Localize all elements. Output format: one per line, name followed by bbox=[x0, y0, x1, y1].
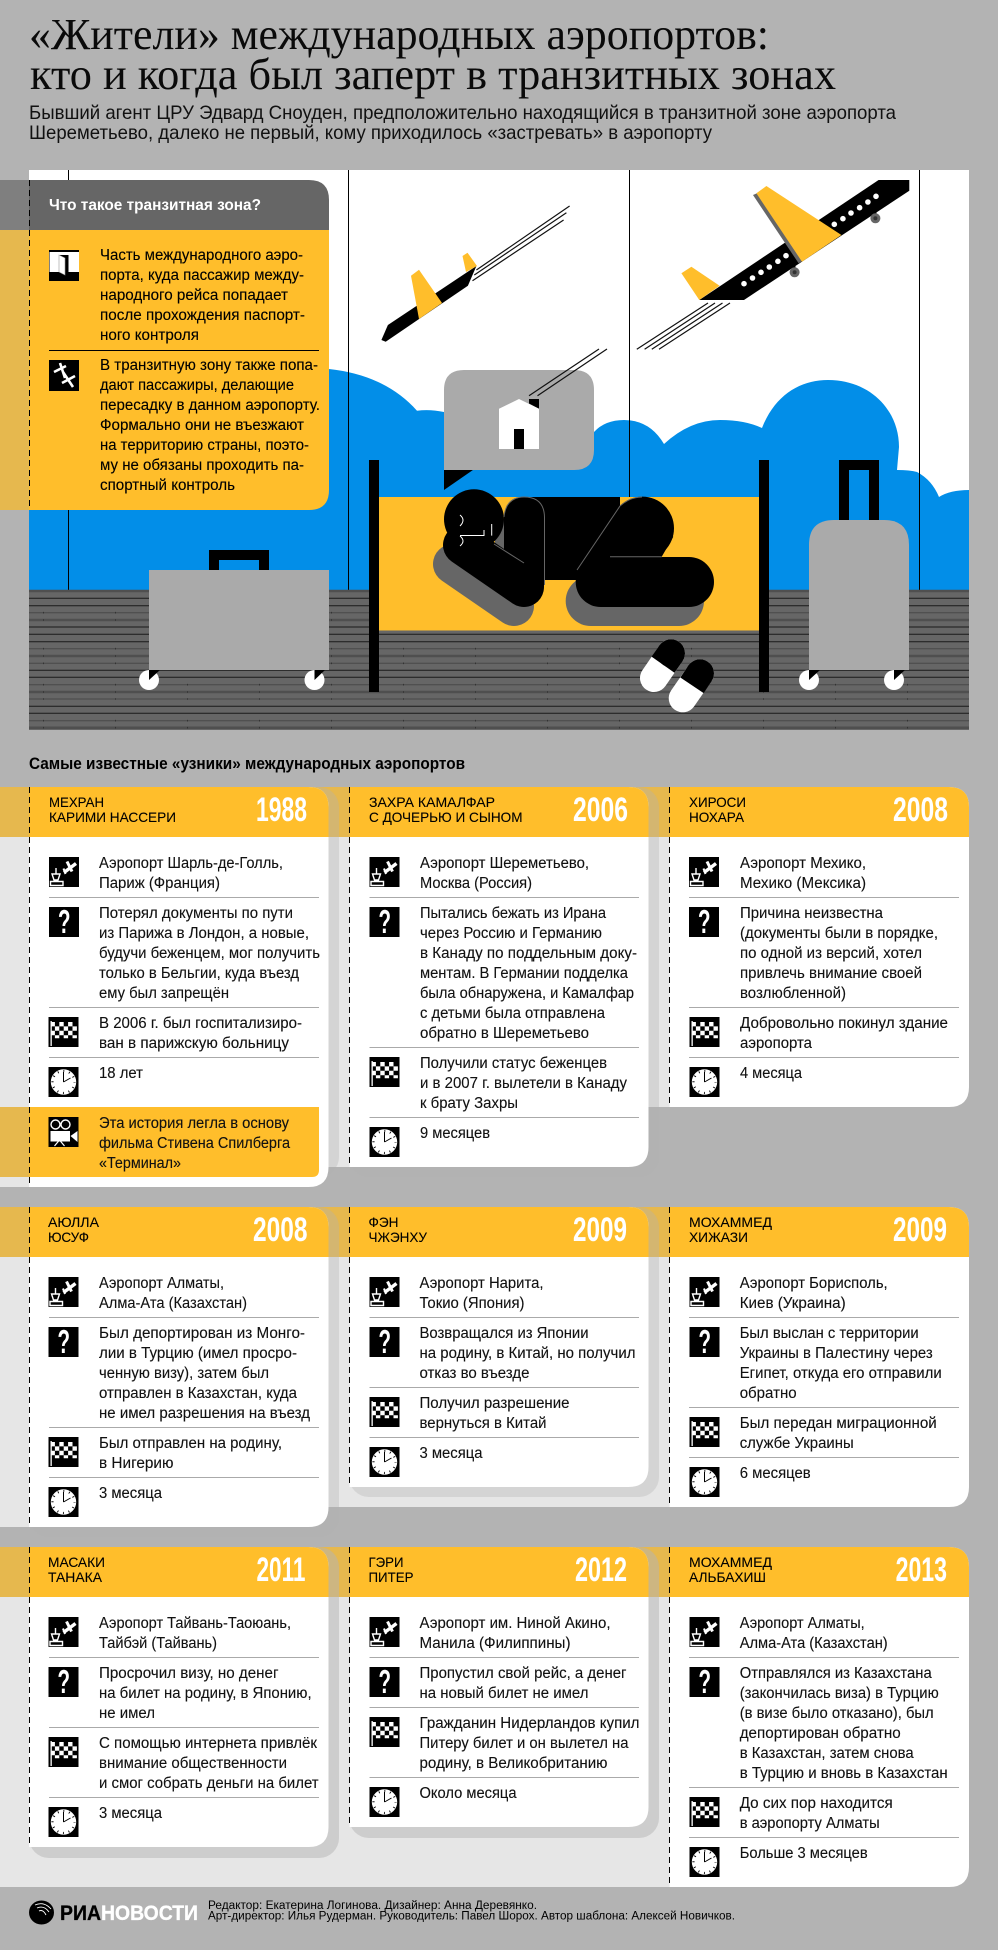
icon: door bbox=[49, 250, 79, 281]
icon: finish flag bbox=[370, 1397, 400, 1427]
card header: ХИРОСИ bbox=[689, 794, 746, 810]
text: definition: Часть международного аэро- bbox=[100, 247, 303, 264]
card header: АЛЬБАХИШ bbox=[689, 1569, 766, 1585]
subtitle: Шереметьево, далеко не первый, кому приходилось «застревать» в аэропорту bbox=[29, 122, 712, 144]
panel heading: Что такое транзитная зона? bbox=[49, 197, 261, 214]
text: outcome bbox=[420, 1715, 640, 1772]
card header: 2008 bbox=[253, 1211, 308, 1249]
row 1 strips and shadows bbox=[0, 787, 670, 1187]
icon: question bbox=[48, 1663, 78, 1700]
text: reason: не имел разрешения на въезд bbox=[99, 1405, 310, 1422]
icon: crossed planes bbox=[49, 360, 79, 391]
text: reason: лии в Турцию (имел просро- bbox=[99, 1345, 297, 1362]
text: outcome: вернуться в Китай bbox=[420, 1415, 546, 1432]
card header bbox=[350, 787, 648, 837]
text: airport: Алма-Ата (Казахстан) bbox=[99, 1295, 247, 1312]
text: reason: возлюбленной) bbox=[740, 985, 846, 1002]
text: reason: Просрочил визу, но денег bbox=[99, 1665, 279, 1682]
icon: clock bbox=[370, 1787, 400, 1817]
card header bbox=[29, 787, 328, 837]
icon: finish flag bbox=[370, 1057, 400, 1087]
text: reason: через Россию и Германию bbox=[420, 925, 602, 942]
text: outcome: службе Украины bbox=[740, 1435, 854, 1452]
text: reason: в Казахстан, затем снова bbox=[740, 1745, 914, 1762]
text: reason: депортирован обратно bbox=[740, 1725, 901, 1742]
text: reason: отказ во въезде bbox=[420, 1365, 530, 1382]
text: outcome: и в 2007 г. вылетели в Канаду bbox=[420, 1075, 627, 1092]
card header: ТАНАКА bbox=[48, 1569, 103, 1585]
text: reason: на родину, в Китай, но получил bbox=[420, 1345, 636, 1362]
text: outcome bbox=[99, 1735, 319, 1792]
card: Zahra Kamalfar bbox=[350, 787, 648, 1167]
text: reason: (документы были в порядке, bbox=[740, 925, 938, 942]
text: airport: Аэропорт Алматы, bbox=[740, 1615, 865, 1632]
card header bbox=[29, 1207, 328, 1257]
text: duration: Около месяца bbox=[420, 1785, 517, 1802]
text: airport: Манила (Филиппины) bbox=[420, 1635, 570, 1652]
icon: finish flag bbox=[370, 1717, 400, 1747]
card header: 2012 bbox=[575, 1551, 627, 1589]
callout: Terminal film: фильма Стивена Спилберга bbox=[99, 1135, 290, 1152]
card header: ФЭН bbox=[368, 1214, 398, 1230]
card header: ЮСУФ bbox=[48, 1229, 89, 1245]
text: outcome: До сих пор находится bbox=[740, 1795, 893, 1812]
text: transit passengers: В транзитную зону также попа- bbox=[100, 357, 318, 374]
title: кто и когда был заперт в транзитных зонах bbox=[30, 50, 836, 99]
subtitle: Бывший агент ЦРУ Эдвард Сноуден, предположительно находящийся в транзитной зоне аэропорта bbox=[29, 102, 896, 124]
text: airport bbox=[740, 855, 866, 892]
icon: question bbox=[48, 1323, 78, 1360]
text: airport bbox=[99, 855, 283, 892]
icon: airport bbox=[49, 857, 79, 887]
icon: airport bbox=[48, 1617, 78, 1647]
text: airport bbox=[740, 1615, 888, 1652]
text: reason: из Парижа в Лондон, а новые, bbox=[99, 925, 309, 942]
text: outcome: Был отправлен на родину, bbox=[99, 1435, 282, 1452]
icon: airport bbox=[689, 857, 719, 887]
text: transit passengers: пересадку в данном аэропорту. bbox=[100, 397, 320, 414]
card header: 2011 bbox=[256, 1551, 306, 1589]
card header bbox=[670, 1207, 969, 1257]
icon: clock bbox=[48, 1067, 78, 1097]
logo: RIA Novosti: РИА bbox=[60, 1902, 101, 1925]
icon: question bbox=[49, 903, 79, 940]
text: transit passengers: Формально они не въезжают bbox=[100, 417, 304, 434]
icon: question bbox=[370, 1663, 400, 1700]
text: airport bbox=[420, 855, 589, 892]
row 3 strips and shadows bbox=[0, 1547, 670, 1887]
text: outcome: в аэропорту Алматы bbox=[740, 1815, 880, 1832]
text: airport bbox=[99, 1615, 291, 1652]
clouds and sky bbox=[29, 369, 969, 590]
text: reason: Пропустил свой рейс, а денег bbox=[420, 1665, 627, 1682]
text: reason: по одной из версий, хотел bbox=[740, 945, 922, 962]
text: reason: ему был запрещён bbox=[99, 985, 229, 1002]
card: Feng Zhenghu bbox=[350, 1207, 648, 1487]
icon: clock bbox=[690, 1467, 720, 1497]
title bbox=[29, 10, 836, 99]
text: outcome bbox=[420, 1055, 627, 1112]
text: outcome: внимание общественности bbox=[99, 1755, 287, 1772]
text: airport bbox=[99, 1275, 247, 1312]
icon: finish flag bbox=[690, 1417, 720, 1447]
text: duration: 3 месяца bbox=[420, 1445, 483, 1462]
icon: clock bbox=[690, 1067, 720, 1097]
text: airport: Токио (Япония) bbox=[420, 1295, 524, 1312]
text: airport: Тайбэй (Тайвань) bbox=[99, 1635, 217, 1652]
card header: 2009 bbox=[893, 1211, 947, 1249]
text: outcome: к брату Захры bbox=[420, 1095, 518, 1112]
text: reason bbox=[740, 1325, 942, 1402]
icon: clock bbox=[690, 1847, 720, 1877]
card: Gary Peter bbox=[350, 1547, 648, 1827]
title: «Жители» международных аэропортов: bbox=[29, 10, 769, 59]
text: outcome bbox=[740, 1415, 937, 1452]
card header: С ДОЧЕРЬЮ И СЫНОМ bbox=[369, 809, 522, 825]
text: reason: ментам. В Германии подделка bbox=[420, 965, 628, 982]
illustration: airport scene bbox=[29, 170, 969, 730]
text: definition bbox=[100, 247, 305, 344]
text: reason: привлечь внимание своей bbox=[740, 965, 922, 982]
text: outcome: С помощью интернета привлёк bbox=[99, 1735, 317, 1752]
card header bbox=[670, 787, 969, 837]
credits: Редактор: Екатерина Логинова. Дизайнер: Анна Деревянко. bbox=[208, 1900, 537, 1912]
text: reason: Отправлялся из Казахстана bbox=[740, 1665, 932, 1682]
icon: airport bbox=[690, 1617, 720, 1647]
text: reason: Причина неизвестна bbox=[740, 905, 883, 922]
icon: airport bbox=[370, 1277, 400, 1307]
bench bbox=[379, 497, 759, 632]
card: Mohammed Hijazi bbox=[670, 1207, 969, 1507]
icon: airport bbox=[690, 1277, 720, 1307]
card: Mehran Karimi Nasseri bbox=[0, 787, 328, 1187]
text: airport: Мехико (Мексика) bbox=[740, 875, 866, 892]
text: reason bbox=[99, 1325, 310, 1422]
text: airport bbox=[420, 1615, 610, 1652]
card: Ayulla Yusuf bbox=[29, 1207, 328, 1527]
text: airport: Париж (Франция) bbox=[99, 875, 220, 892]
text: definition: ного контроля bbox=[100, 327, 199, 344]
small plane bbox=[381, 206, 570, 342]
panel: what is a transit zone bbox=[0, 180, 329, 510]
text: reason: отправлен в Казахстан, куда bbox=[99, 1385, 297, 1402]
text: airport: Аэропорт им. Ниной Акино, bbox=[420, 1615, 610, 1632]
credits: Арт-директор: Илья Рудерман. Руководитель: Павел Шорох. Автор шаблона: Алексей Новичков. bbox=[208, 1910, 735, 1922]
text: reason: только в Бельгии, куда въезд bbox=[99, 965, 299, 982]
card header bbox=[670, 1547, 969, 1597]
card header: ПИТЕР bbox=[368, 1569, 414, 1585]
text: outcome: Гражданин Нидерландов купил bbox=[420, 1715, 640, 1732]
card header bbox=[350, 1547, 648, 1597]
text: reason: на билет на родину, в Японию, bbox=[99, 1685, 312, 1702]
text: airport: Аэропорт Борисполь, bbox=[740, 1275, 888, 1292]
text: reason: Пытались бежать из Ирана bbox=[420, 905, 606, 922]
text: reason bbox=[740, 905, 938, 1002]
text: outcome bbox=[740, 1795, 893, 1832]
icon: finish flag bbox=[48, 1737, 78, 1767]
text: reason: с детьми была отправлена bbox=[420, 1005, 605, 1022]
subtitle bbox=[29, 102, 896, 144]
card header: МОХАММЕД bbox=[689, 1554, 773, 1570]
text: airport: Москва (Россия) bbox=[420, 875, 532, 892]
text: transit passengers bbox=[100, 357, 320, 494]
card header: АЮЛЛА bbox=[48, 1214, 100, 1230]
card header: ЧЖЭНХУ bbox=[368, 1229, 427, 1245]
text: duration: 3 месяца bbox=[99, 1805, 162, 1822]
icon: airport bbox=[370, 857, 400, 887]
card header: 2006 bbox=[573, 791, 628, 829]
text: outcome bbox=[740, 1015, 948, 1052]
text: reason bbox=[99, 1665, 312, 1722]
card: Hiroshi Nohara bbox=[670, 787, 969, 1107]
card header: МЕХРАН bbox=[49, 794, 104, 810]
text: airport bbox=[740, 1275, 888, 1312]
icon: clock bbox=[370, 1127, 400, 1157]
card header bbox=[29, 1547, 328, 1597]
icon: clock bbox=[48, 1487, 78, 1517]
text: outcome bbox=[99, 1015, 302, 1052]
text: reason: в Канаду по поддельным доку- bbox=[420, 945, 637, 962]
text: airport: Аэропорт Алматы, bbox=[99, 1275, 224, 1292]
text: reason: Египет, откуда его отправили bbox=[740, 1365, 942, 1382]
text: reason: на новый билет не имел bbox=[420, 1685, 588, 1702]
logo: RIA Novosti bbox=[29, 1900, 198, 1925]
card header: ЗАХРА КАМАЛФАР bbox=[369, 794, 495, 810]
card header: ГЭРИ bbox=[368, 1554, 404, 1570]
text: outcome: Добровольно покинул здание bbox=[740, 1015, 948, 1032]
speech bubble with house bbox=[444, 349, 607, 490]
text: outcome bbox=[99, 1435, 282, 1472]
callout: Terminal film bbox=[0, 1107, 319, 1177]
icon: finish flag bbox=[48, 1437, 78, 1467]
text: duration: 4 месяца bbox=[740, 1065, 802, 1082]
icon: finish flag bbox=[690, 1797, 720, 1827]
sleeping person bbox=[444, 489, 714, 626]
text: reason: Возвращался из Японии bbox=[420, 1325, 588, 1342]
callout: Terminal film: Эта история легла в основу bbox=[99, 1115, 289, 1132]
bench poles bbox=[369, 460, 769, 692]
icon: airport bbox=[48, 1277, 78, 1307]
icon: question bbox=[690, 1663, 720, 1700]
icon: finish flag bbox=[48, 1017, 78, 1047]
text: outcome: родину, в Великобританию bbox=[420, 1755, 608, 1772]
text: transit passengers: дают пассажиры, делающие bbox=[100, 377, 294, 394]
card header: 2008 bbox=[893, 791, 948, 829]
icon: finish flag bbox=[690, 1017, 720, 1047]
text: airport: Аэропорт Шарль-де-Голль, bbox=[99, 855, 283, 872]
large plane bbox=[637, 180, 909, 349]
text: airport: Алма-Ата (Казахстан) bbox=[740, 1635, 888, 1652]
text: reason: Был депортирован из Монго- bbox=[99, 1325, 305, 1342]
card: Mohammed Albahish bbox=[670, 1547, 969, 1887]
text: reason: Был выслан с территории bbox=[740, 1325, 919, 1342]
card: Masaki Tanaka bbox=[29, 1547, 328, 1847]
text: airport bbox=[420, 1275, 544, 1312]
text: outcome: ван в парижскую больницу bbox=[99, 1035, 289, 1052]
text: transit passengers: на территорию страны, поэто- bbox=[100, 437, 309, 454]
text: airport: Аэропорт Тайвань-Таоюань, bbox=[99, 1615, 291, 1632]
logo: RIA Novosti: НОВОСТИ bbox=[101, 1902, 198, 1925]
credits bbox=[208, 1900, 735, 1922]
text: reason: не имел bbox=[99, 1705, 155, 1722]
card header: 1988 bbox=[256, 791, 307, 829]
text: duration: 3 месяца bbox=[99, 1485, 162, 1502]
text: reason bbox=[740, 1665, 948, 1782]
text: reason: обратно bbox=[740, 1385, 797, 1402]
text: duration: 9 месяцев bbox=[420, 1125, 490, 1142]
text: duration: Больше 3 месяцев bbox=[740, 1845, 868, 1862]
text: reason: Украины в Палестину через bbox=[740, 1345, 933, 1362]
text: reason: (в визе было отказано), был bbox=[740, 1705, 934, 1722]
text: outcome: В 2006 г. был госпитализиро- bbox=[99, 1015, 302, 1032]
icon: clock bbox=[370, 1447, 400, 1477]
text: outcome: Получил разрешение bbox=[420, 1395, 570, 1412]
left suitcase bbox=[139, 555, 329, 690]
text: duration: 18 лет bbox=[99, 1065, 143, 1082]
text: definition: после прохождения паспорт- bbox=[100, 307, 305, 324]
text: reason: в Турцию и вновь в Казахстан bbox=[740, 1765, 948, 1782]
card header: МОХАММЕД bbox=[689, 1214, 773, 1230]
icon: question bbox=[370, 903, 400, 940]
text: airport: Аэропорт Нарита, bbox=[420, 1275, 544, 1292]
icon: question bbox=[690, 1323, 720, 1360]
text: outcome: Был передан миграционной bbox=[740, 1415, 937, 1432]
text: outcome: аэропорта bbox=[740, 1035, 812, 1052]
text: reason: (закончилась виза) в Турцию bbox=[740, 1685, 939, 1702]
row 2 strips and shadows bbox=[0, 1207, 670, 1537]
card header: ХИЖАЗИ bbox=[689, 1229, 748, 1245]
text: duration: 6 месяцев bbox=[740, 1465, 811, 1482]
text: definition: порта, куда пассажир между- bbox=[100, 267, 304, 284]
callout: Terminal film: «Терминал» bbox=[99, 1155, 181, 1172]
text: reason: ченную визу), затем был bbox=[99, 1365, 269, 1382]
text: transit passengers: спортный контроль bbox=[100, 477, 235, 494]
text: reason bbox=[420, 1665, 627, 1702]
card header: 2013 bbox=[896, 1551, 947, 1589]
text: outcome: Получили статус беженцев bbox=[420, 1055, 607, 1072]
text: reason bbox=[420, 1325, 636, 1382]
card header: КАРИМИ НАССЕРИ bbox=[49, 809, 176, 825]
text: transit passengers: му не обязаны проходить па- bbox=[100, 457, 304, 474]
text: reason: будучи беженцем, мог получить bbox=[99, 945, 320, 962]
card header: НОХАРА bbox=[689, 809, 745, 825]
text: reason: обратно в Шереметьево bbox=[420, 1025, 589, 1042]
icon: airport bbox=[370, 1617, 400, 1647]
icon: question bbox=[370, 1323, 400, 1360]
text: reason bbox=[99, 905, 320, 1002]
card header: 2009 bbox=[573, 1211, 627, 1249]
icon: question bbox=[689, 903, 719, 940]
section heading: Самые известные «узники» международных аэропортов bbox=[29, 754, 465, 773]
text: outcome: в Нигерию bbox=[99, 1455, 174, 1472]
slippers bbox=[654, 639, 714, 698]
icon: clock bbox=[48, 1807, 78, 1837]
text: reason: Потерял документы по пути bbox=[99, 905, 293, 922]
text: reason: была обнаружена, и Камалфар bbox=[420, 985, 634, 1002]
text: reason bbox=[420, 905, 637, 1042]
text: outcome: Питеру билет и он вылетел на bbox=[420, 1735, 629, 1752]
card header bbox=[350, 1207, 648, 1257]
text: definition: народного рейса попадает bbox=[100, 287, 288, 304]
floor bbox=[29, 590, 969, 730]
text: airport: Аэропорт Мехико, bbox=[740, 855, 866, 872]
text: outcome: и смог собрать деньги на билет bbox=[99, 1775, 319, 1792]
text: airport: Аэропорт Шереметьево, bbox=[420, 855, 589, 872]
card header: МАСАКИ bbox=[48, 1554, 105, 1570]
right suitcase bbox=[799, 465, 909, 690]
text: airport: Киев (Украина) bbox=[740, 1295, 846, 1312]
text: outcome bbox=[420, 1395, 570, 1432]
